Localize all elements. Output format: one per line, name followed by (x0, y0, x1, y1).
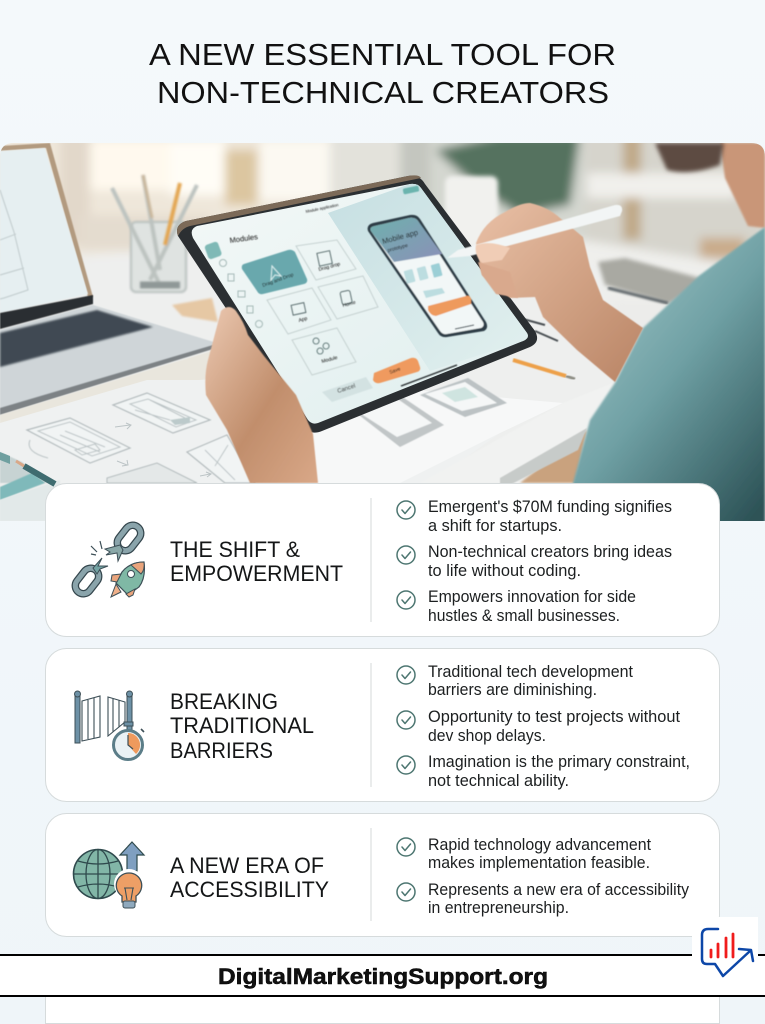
bullet list: Rapid technology advancement (428, 836, 651, 854)
title: NON-TECHNICAL CREATORS (157, 75, 609, 110)
blurred room background (5, 143, 763, 264)
buttons (373, 358, 420, 383)
bullet list: Imagination is the primary constraint, (428, 753, 690, 771)
heading: EMPOWERMENT (170, 561, 343, 586)
footer band: DigitalMarketingSupport.org (218, 964, 548, 989)
tablet (177, 175, 537, 433)
tablet: Module (321, 355, 339, 365)
bullet list: barriers are diminishing. (428, 681, 597, 699)
desk front edge and floor (420, 383, 613, 483)
bullet list: Empowers innovation for side (428, 588, 636, 606)
bullet list (397, 663, 690, 790)
heading: TRADITIONAL (170, 713, 314, 738)
tablet: Modules (229, 232, 259, 245)
left hand holding tablet (205, 307, 318, 483)
icon: globe, arrow and light bulb (74, 842, 144, 908)
dark stripes beside the tablet (523, 319, 558, 341)
cup (445, 176, 498, 248)
tiles (242, 250, 307, 294)
title (149, 37, 616, 110)
panel: the shift and empowerment (46, 484, 720, 636)
heading (170, 689, 314, 763)
bullet list (397, 498, 672, 625)
tablet: Save (389, 366, 402, 376)
stacked paper and teal pencil (0, 452, 50, 483)
heading (170, 537, 343, 586)
heading: BREAKING (170, 689, 278, 714)
bullet list: to life without coding. (428, 562, 581, 580)
sidebar (204, 241, 222, 260)
back desk notebook (598, 258, 707, 304)
neck and beard (720, 143, 765, 228)
phone mockup: Mobile app (381, 228, 419, 246)
tan notepad (172, 298, 218, 322)
bullet list: a shift for startups. (428, 517, 562, 535)
bullet list: Emergent's $70M funding signifies (428, 498, 672, 516)
laptop (0, 143, 217, 415)
heading: A NEW ERA OF (170, 853, 324, 878)
tablet: Home (342, 300, 357, 309)
bullet list: hustles & small businesses. (428, 607, 620, 625)
bullet list (397, 836, 690, 917)
bullet list: makes implementation feasible. (428, 854, 650, 872)
heading: ACCESSIBILITY (170, 877, 329, 902)
bullet list: Represents a new era of accessibility (428, 881, 690, 899)
logo: chat bubble with bars and arrow (692, 917, 758, 987)
bullet list: not technical ability. (428, 772, 569, 790)
clipped card below the footer (46, 997, 720, 1024)
tablet: Drag and Drop (262, 272, 295, 289)
heading (170, 853, 329, 902)
bullet list: dev shop delays. (428, 727, 546, 745)
tablet: Cancel (337, 383, 356, 395)
bullet list: Opportunity to test projects without (428, 708, 680, 726)
panel: breaking traditional barriers (46, 648, 720, 802)
shirt (573, 227, 765, 525)
tablet: Drag drop (318, 261, 341, 273)
icon: broken chain and rocket (72, 522, 144, 597)
icon: open gate and stopwatch (74, 691, 144, 760)
heading: BARRIERS (170, 738, 273, 763)
panel: a new era of accessibility (46, 814, 720, 936)
title: A NEW ESSENTIAL TOOL FOR (149, 37, 616, 72)
hero photo: person using a tablet app builder (0, 135, 765, 525)
right hand with stylus (447, 203, 643, 382)
bullet list: Non-technical creators bring ideas (428, 543, 672, 561)
heading: THE SHIFT & (170, 537, 300, 562)
phone mockup (368, 215, 487, 337)
footer band (0, 954, 765, 997)
tablet: App (298, 316, 308, 324)
orange pencil (513, 360, 566, 376)
bullet list: Traditional tech development (428, 663, 633, 681)
beige desk strip (0, 350, 220, 425)
tablet: Module application (305, 202, 339, 214)
pencil holder (112, 175, 197, 292)
wireframe paper on desk (0, 378, 563, 521)
bullet list: in entrepreneurship. (428, 899, 569, 917)
phone mockup: prototype (387, 243, 409, 254)
